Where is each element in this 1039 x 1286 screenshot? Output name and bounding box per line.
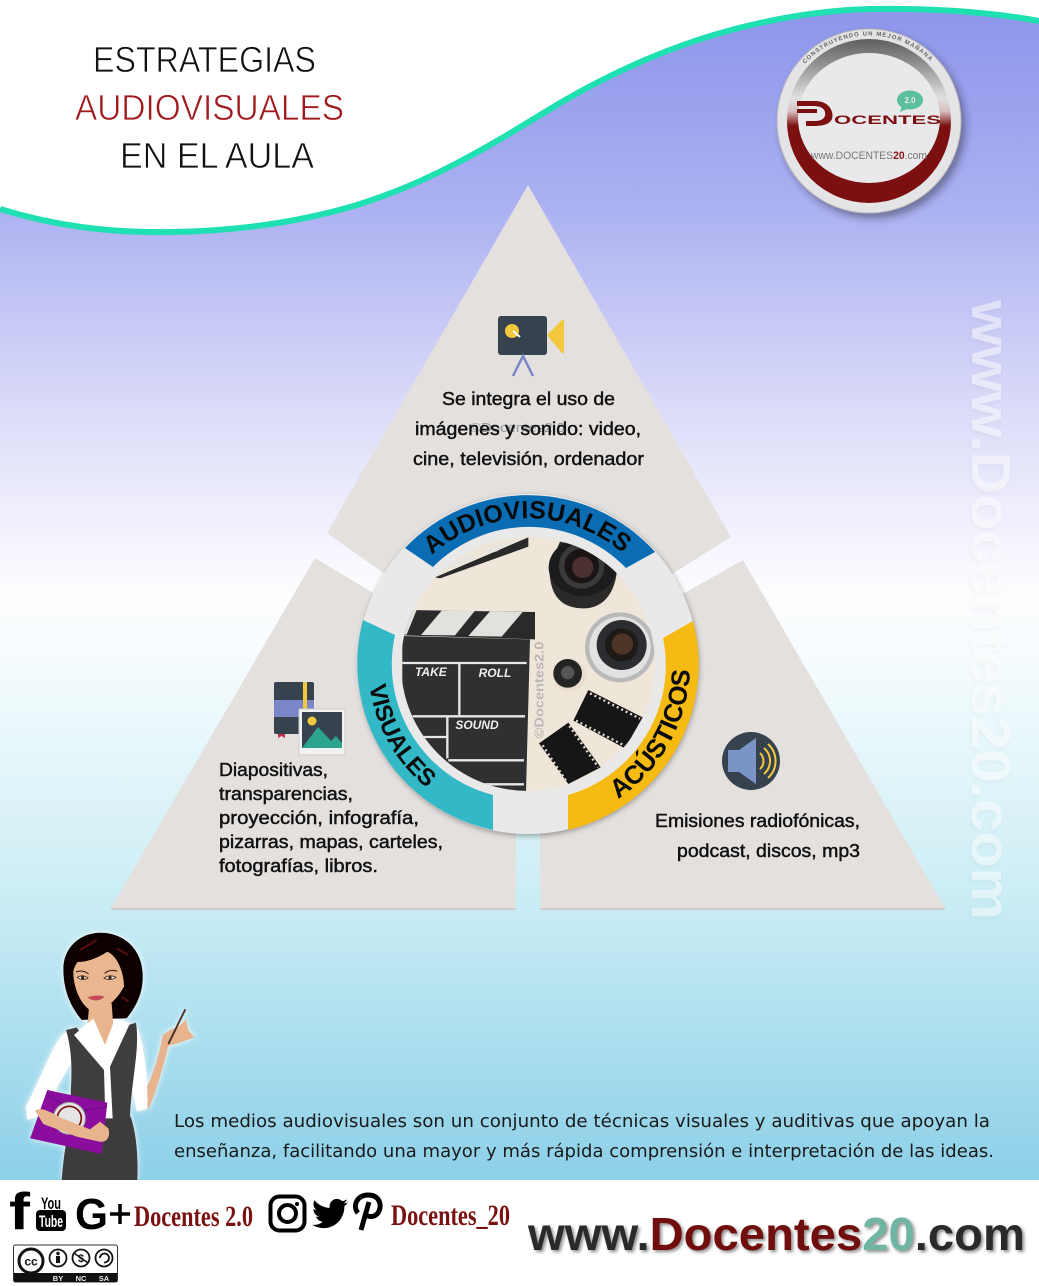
icon: youtube (36, 1194, 66, 1231)
panel: visuales triangle (111, 558, 516, 910)
icon: instagram (270, 1196, 304, 1230)
logo: Docentes 2.0: www.DOCENTES20.com (810, 150, 927, 162)
icon: video camera (498, 316, 564, 376)
white top wave (0, 0, 1039, 232)
footer social row one (9, 1183, 510, 1241)
segment: acusticos band: ACÚSTICOS (613, 670, 690, 799)
body text: Los medios audiovisuales son un conjunto de técnicas visuales y auditivas que apoyan la (174, 1111, 990, 1132)
text: audiovisuales description: Se integra el uso de (442, 389, 615, 409)
segment: audiovisuales band: AUDIOVISUALES (426, 501, 631, 554)
lens two (585, 612, 655, 682)
hair (63, 933, 143, 1020)
skirt (62, 1117, 138, 1180)
license badge: cc (24, 1254, 38, 1268)
body text: enseñanza, facilitando una mayor y más rápida comprensión e interpretación de las ideas. (174, 1141, 994, 1162)
face (73, 952, 124, 1012)
film strips (573, 690, 643, 748)
text: audiovisuales description: ©Docentes2.0 (470, 420, 565, 435)
vertical watermark: www.Docentes20.com (960, 299, 1022, 920)
label: Docentes_20: Docentes_20 (391, 1199, 510, 1232)
license badge: BY (53, 1274, 63, 1283)
icon: google plus (75, 1190, 130, 1239)
photo: clapperboard, lenses and film: ROLL (479, 666, 511, 680)
body text (174, 1111, 994, 1162)
segment: acusticos band (568, 621, 699, 830)
shirt sleeves (26, 1032, 73, 1120)
logo: Docentes 2.0: CONSTRUYENDO UN MEJOR MAÑANA (802, 31, 932, 64)
text: visuales description: pizarras, mapas, carteles, (219, 832, 443, 852)
text: audiovisuales description (413, 389, 644, 469)
icon: pinterest (355, 1195, 380, 1230)
text: audiovisuales description: cine, televisión, ordenador (413, 449, 644, 469)
license badge: NC (76, 1274, 87, 1283)
shirt collar and front (74, 1018, 130, 1118)
text: visuales description: proyección, infografía, (219, 808, 419, 828)
text: visuales description (219, 760, 443, 876)
photo: clapperboard, lenses and film (397, 533, 663, 797)
folder badge (53, 1102, 85, 1134)
panel: acusticos triangle (540, 560, 945, 910)
license badge: $ (78, 1253, 84, 1265)
logo: Docentes 2.0: OCENTES (834, 113, 941, 127)
right arm (144, 1019, 194, 1110)
icon: google plus: G (75, 1190, 108, 1239)
text: audiovisuales description: imágenes y sonido: video, (415, 419, 641, 439)
text: visuales description: fotografías, libros. (219, 856, 378, 876)
text: acusticos description (655, 811, 860, 861)
website url: www.Docentes20.com (527, 1208, 1025, 1260)
text: acusticos description: podcast, discos, mp3 (677, 841, 860, 861)
icon: twitter (312, 1199, 348, 1228)
photo watermark: ©Docentes2.0 (532, 642, 546, 738)
central circle (356, 492, 702, 840)
icon: facebook: f (9, 1183, 31, 1241)
vest (66, 1023, 137, 1118)
panel: audiovisuales triangle (327, 185, 731, 574)
forearm over folder (35, 1109, 109, 1142)
teacher illustration (26, 933, 194, 1180)
clapper closed on top (435, 537, 528, 578)
title: ESTRATEGIAS (93, 39, 316, 80)
icon: youtube: You (41, 1194, 61, 1213)
icon: youtube: Tube (39, 1212, 63, 1231)
footer white band (0, 1180, 1039, 1286)
segment: visuales band (357, 620, 493, 830)
clapperboard (403, 610, 535, 639)
icon: speaker (722, 732, 780, 790)
text: acusticos description: Emisiones radiofónicas, (655, 811, 860, 831)
photo: clapperboard, lenses and film: TAKE (415, 665, 448, 679)
photo: clapperboard, lenses and film: SOUND (455, 718, 499, 732)
title (75, 39, 344, 176)
purple folder (30, 1090, 107, 1154)
segment: visuales band: VISUALES (370, 682, 436, 786)
title: AUDIOVISUALES (75, 87, 344, 128)
text: visuales description: Diapositivas, (219, 760, 328, 780)
logo: Docentes 2.0: 2.0 (904, 96, 916, 105)
text: visuales description: transparencias, (219, 784, 353, 804)
logo: Docentes 2.0 (776, 28, 970, 224)
neck and chest (88, 1003, 114, 1045)
small lens (553, 658, 586, 692)
license badge: SA (99, 1274, 110, 1283)
lens one (549, 542, 617, 608)
pen (168, 1009, 185, 1044)
license badge (14, 1245, 118, 1283)
title: EN EL AULA (120, 135, 314, 176)
label: Docentes 2.0: Docentes 2.0 (134, 1200, 253, 1233)
icon: books and picture (274, 682, 345, 755)
